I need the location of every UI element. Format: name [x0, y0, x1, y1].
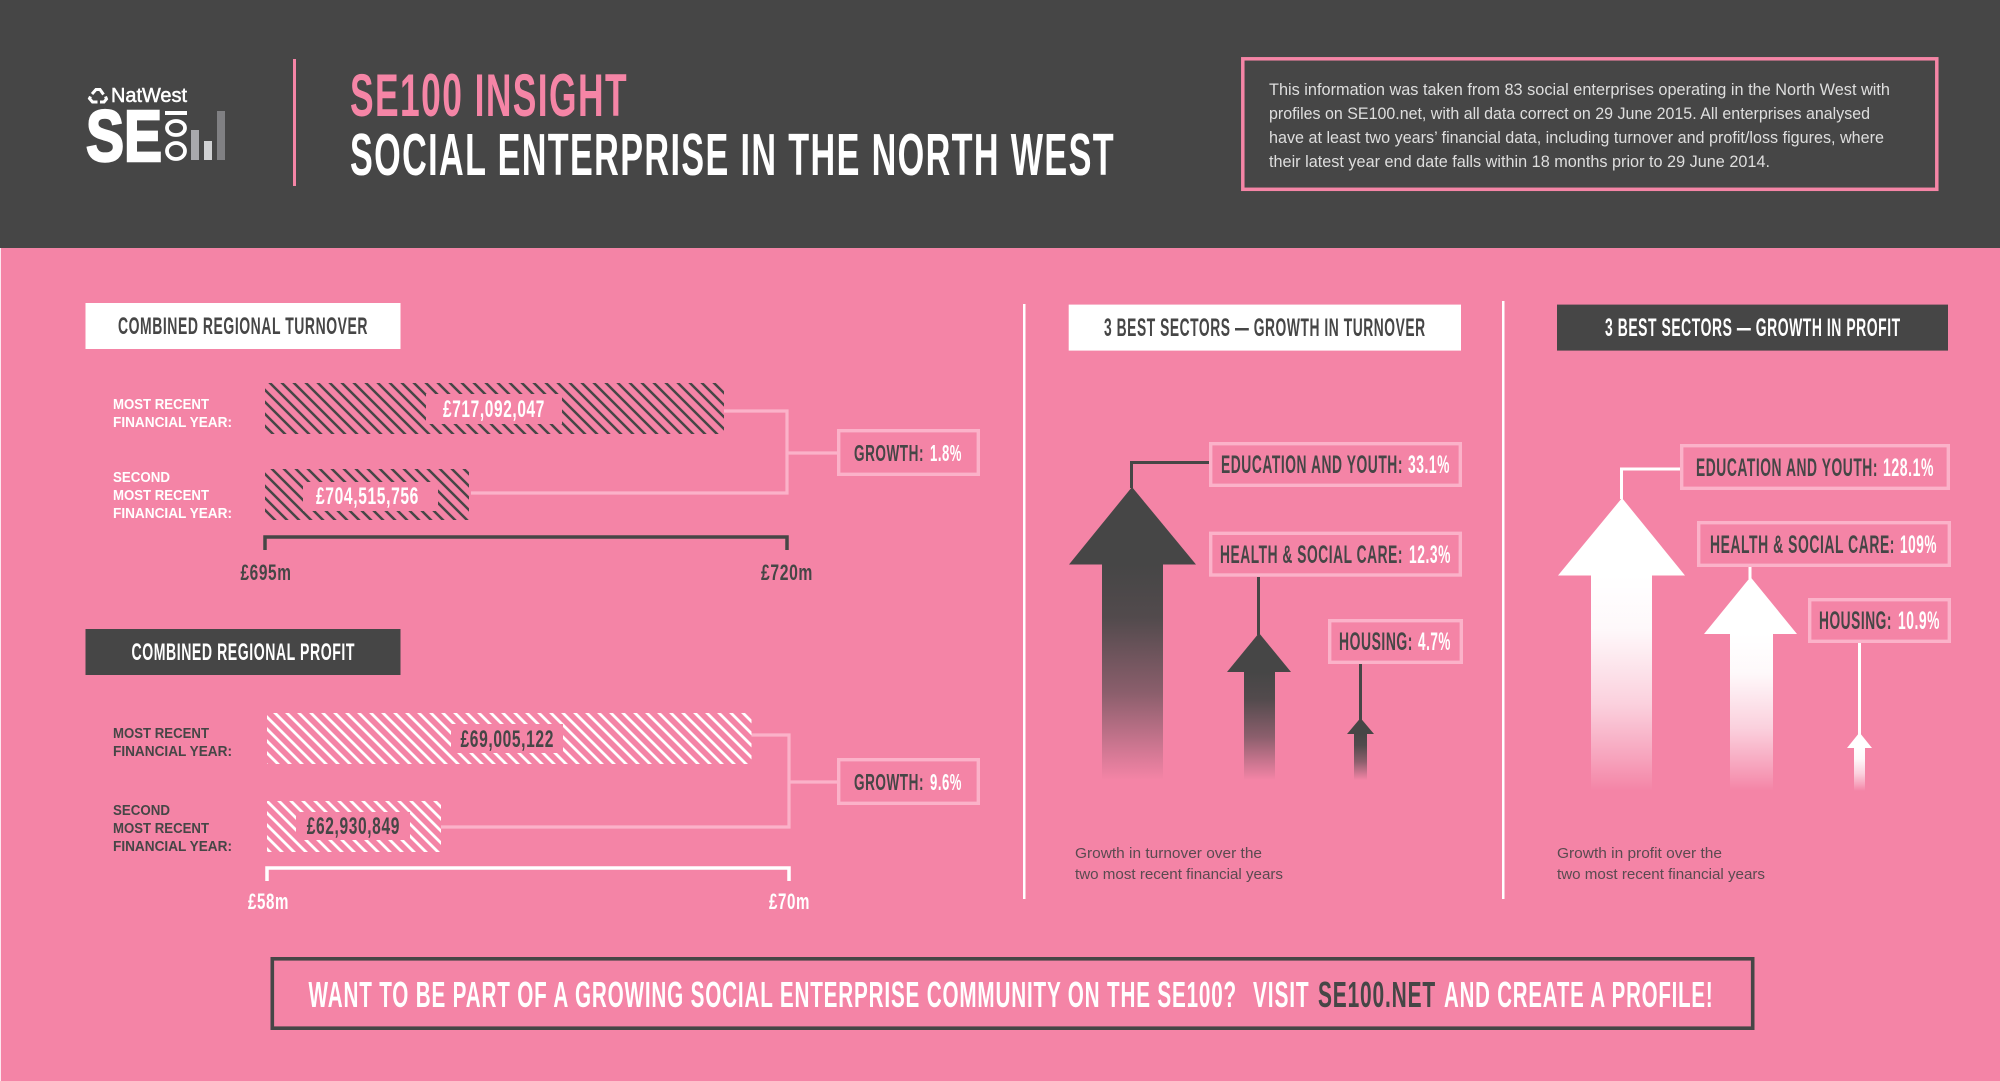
connector: education [1622, 469, 1680, 499]
callout: housing [1810, 600, 1949, 641]
connector: health [1257, 577, 1260, 635]
caption: Growth in profit over the [1557, 845, 1722, 862]
callout: housing: HOUSING: [1339, 628, 1413, 656]
connector: health [1748, 567, 1752, 579]
callout: health and social care: 109% [1900, 531, 1937, 559]
arrow: education and youth profit [1558, 498, 1685, 791]
row label: most recent: FINANCIAL YEAR: [113, 415, 232, 431]
row label: second most recent [113, 803, 232, 855]
panel: best sectors growth in turnover [1069, 305, 1461, 883]
callout: health and social care [1699, 523, 1949, 565]
growth callout: 1.8% [930, 440, 962, 466]
row label: second most recent: FINANCIAL YEAR: [113, 839, 232, 855]
heading: growth in profit [1557, 305, 1948, 351]
arrow: health and social care profit [1704, 577, 1797, 791]
growth callout: GROWTH: [854, 440, 924, 466]
row label: most recent [113, 397, 232, 431]
call to action: AND CREATE A PROFILE! [1444, 974, 1714, 1015]
icon: NatWest symbol [90, 90, 106, 102]
caption [1075, 845, 1283, 883]
callout: education and youth [1682, 446, 1948, 488]
call to action: VISIT [1253, 974, 1310, 1015]
caption [1557, 845, 1765, 883]
heading: combined regional profit [86, 629, 400, 675]
bar: second most recent profit [267, 801, 441, 852]
row label: most recent: MOST RECENT [113, 397, 209, 413]
row label: second most recent: SECOND [113, 803, 170, 819]
bar: second most recent profit: £62,930,849 [307, 813, 400, 840]
callout: housing [1330, 621, 1461, 662]
panel: combined regional turnover [86, 303, 978, 585]
row label: most recent: MOST RECENT [113, 726, 209, 742]
callout: education and youth: EDUCATION AND YOUTH: [1221, 451, 1403, 479]
callout: housing: 10.9% [1898, 607, 1940, 635]
row label: most recent [113, 726, 232, 760]
info box: profiles on SE100.net, with all data correct on 29 June 2015. All enterprises analysed [1269, 105, 1870, 123]
connector bracket [471, 411, 837, 493]
callout: health and social care: HEALTH & SOCIAL CARE: [1220, 541, 1403, 569]
call to action [272, 959, 1753, 1028]
axis: profit: £70m [769, 889, 810, 914]
connector: housing [1858, 643, 1861, 735]
arrow: education and youth turnover [1069, 487, 1196, 780]
heading: growth in turnover: 3 BEST SECTORS — GROWTH IN TURNOVER [1104, 314, 1426, 342]
title: SE100 INSIGHT [350, 62, 628, 129]
connector: housing [1359, 664, 1362, 720]
arrow: housing turnover [1347, 718, 1374, 780]
logo: NatWest SE100: NatWest [111, 85, 187, 107]
connector: education [1132, 462, 1209, 488]
heading: growth in turnover [1069, 305, 1461, 351]
bar: second most recent turnover [265, 469, 469, 520]
row label: second most recent: MOST RECENT [113, 488, 209, 504]
growth callout [839, 431, 978, 474]
axis: profit: £58m [248, 889, 289, 914]
bar: most recent profit: £69,005,122 [460, 726, 554, 753]
arrow: health and social care turnover [1227, 633, 1291, 780]
bar: second most recent turnover: £704,515,756 [316, 483, 419, 510]
logo: NatWest SE100: SE [86, 97, 162, 177]
bar: most recent turnover: £717,092,047 [443, 396, 545, 423]
heading: combined regional turnover [86, 303, 400, 349]
axis: profit [248, 868, 810, 914]
call to action: SE100.NET [1318, 974, 1436, 1015]
growth callout: 9.6% [930, 769, 962, 795]
growth callout: GROWTH: [854, 769, 924, 795]
info box [1243, 59, 1937, 189]
logo: NatWest SE100 [86, 85, 225, 177]
row label: most recent: FINANCIAL YEAR: [113, 744, 232, 760]
connector bracket [441, 735, 837, 827]
callout: housing: 4.7% [1418, 628, 1451, 656]
row label: second most recent: MOST RECENT [113, 821, 209, 837]
row label: second most recent: SECOND [113, 470, 170, 486]
axis: turnover [240, 537, 813, 585]
arrow: housing profit [1847, 732, 1872, 791]
bar: most recent profit [267, 713, 752, 764]
heading: combined regional turnover: COMBINED REGIONAL TURNOVER [118, 313, 368, 340]
info box: have at least two years’ financial data, including turnover and profit/loss figures, where [1269, 129, 1884, 147]
row label: second most recent [113, 470, 232, 522]
row label: second most recent: FINANCIAL YEAR: [113, 506, 232, 522]
caption: two most recent financial years [1557, 866, 1765, 883]
info box: This information was taken from 83 social enterprises operating in the North West with [1269, 81, 1890, 99]
callout: housing: HOUSING: [1819, 607, 1892, 635]
callout: education and youth: 33.1% [1408, 451, 1450, 479]
axis: turnover: £720m [761, 560, 813, 585]
panel: combined regional profit [86, 629, 978, 914]
panel: best sectors growth in profit [1557, 305, 1949, 883]
title: SOCIAL ENTERPRISE IN THE NORTH WEST [350, 122, 1115, 188]
caption: two most recent financial years [1075, 866, 1283, 883]
growth callout [839, 760, 978, 803]
caption: Growth in turnover over the [1075, 845, 1262, 862]
heading: combined regional profit: COMBINED REGIONAL PROFIT [132, 639, 355, 666]
callout: health and social care: 12.3% [1409, 541, 1451, 569]
call to action: WANT TO BE PART OF A GROWING SOCIAL ENTERPRISE COMMUNITY ON THE SE100? [308, 974, 1237, 1015]
callout: education and youth: 128.1% [1883, 454, 1934, 482]
callout: education and youth [1211, 444, 1460, 485]
axis: turnover: £695m [240, 560, 292, 585]
callout: health and social care [1211, 533, 1460, 575]
info box: their latest year end date falls within 18 months prior to 29 June 2014. [1269, 153, 1770, 171]
bar: most recent turnover [265, 383, 724, 434]
title [350, 62, 1115, 188]
